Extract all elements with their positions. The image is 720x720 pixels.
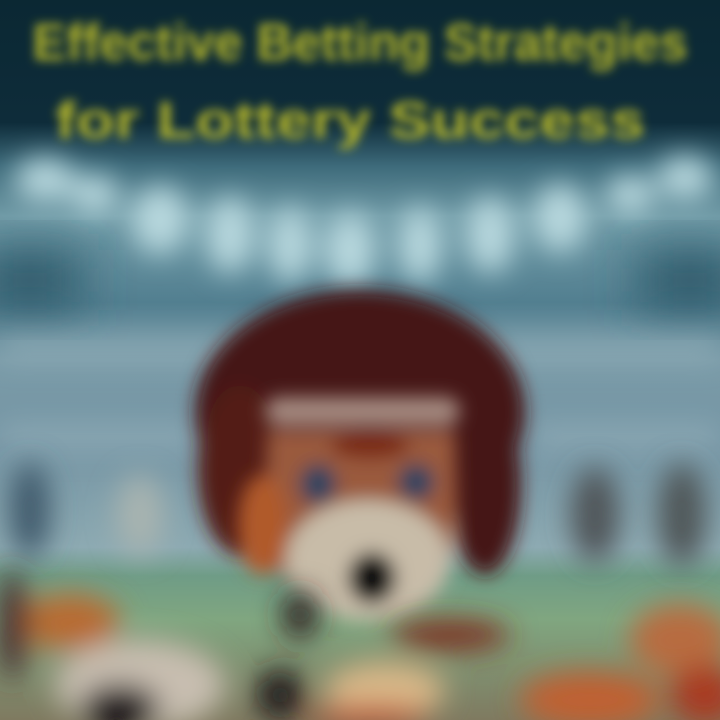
background figures [10,462,706,567]
side shadows [0,250,720,310]
crowd band [0,335,720,451]
foreground: balls and flowers [0,570,720,720]
title [32,14,688,150]
character: face [238,397,460,620]
stadium lights [15,156,713,288]
title: for Lottery Success [55,92,645,150]
title: Effective Betting Strategies [32,14,688,72]
character: afro hair [195,290,525,575]
